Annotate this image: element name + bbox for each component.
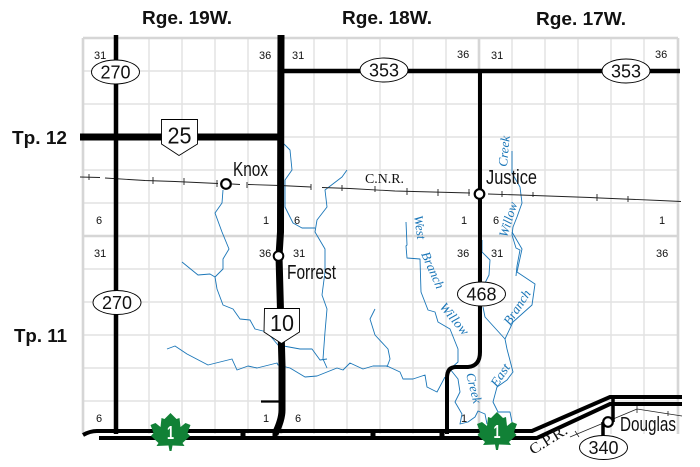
creek labels: Branch: [500, 287, 534, 328]
highway 25: [80, 134, 281, 140]
creek labels: [411, 135, 534, 405]
railway: C.N.R.: [80, 174, 681, 202]
shield: highway 25: [162, 120, 198, 156]
creek labels: Creek: [463, 371, 485, 405]
township labels: [12, 128, 67, 346]
road 270: [114, 35, 118, 434]
section numbers: 31: [491, 50, 503, 62]
oval: 270 north: [92, 60, 140, 84]
oval: 468: 468: [466, 284, 497, 304]
town: Justice: Justice: [486, 167, 537, 189]
creek labels: East: [486, 360, 513, 391]
oval: 353 east: 353: [611, 62, 641, 82]
oval: 340: [580, 436, 628, 460]
section numbers: 36: [655, 49, 667, 61]
oval: 353 west: 353: [369, 60, 399, 80]
section numbers: 31: [292, 50, 304, 62]
creek labels: Willow: [437, 299, 473, 338]
maple leaf: highway 1 east: 1: [494, 422, 500, 442]
creek labels: Creek: [495, 135, 513, 167]
town: Knox: [221, 159, 268, 189]
oval: 468: [458, 282, 506, 306]
section numbers: 1: [263, 413, 269, 425]
maple leaf: highway 1 east: [477, 412, 517, 450]
section numbers: 6: [295, 413, 301, 425]
section numbers: 36: [457, 248, 469, 260]
oval: 270 north: 270: [100, 62, 131, 82]
section numbers: 6: [96, 215, 102, 227]
road 353: [281, 69, 680, 73]
shield: highway 25: 25: [168, 122, 192, 148]
maple leaf: highway 1 west: [150, 413, 190, 451]
section numbers: 36: [259, 50, 271, 62]
side road stub: [261, 400, 280, 403]
town: Justice: [475, 167, 537, 199]
maple leaf: highway 1 west: 1: [167, 423, 174, 443]
section numbers: 36: [656, 248, 668, 260]
section numbers: 6: [96, 413, 102, 425]
road 340: [603, 399, 613, 438]
section numbers: 36: [457, 49, 469, 61]
section numbers: 1: [461, 215, 467, 227]
township grid: [83, 38, 678, 434]
oval: 270 south: [93, 290, 141, 314]
range headings: Rge. 17W.: [536, 9, 626, 29]
highway 10: [275, 35, 282, 434]
section numbers: [94, 49, 668, 425]
range headings: Rge. 18W.: [342, 8, 432, 28]
town: Knox: Knox: [233, 159, 268, 181]
section numbers: 6: [493, 215, 499, 227]
range headings: Rge. 19W.: [142, 8, 232, 28]
section numbers: 31: [94, 248, 106, 260]
town: Forrest: Forrest: [287, 262, 336, 284]
town: Forrest: [274, 251, 336, 284]
oval: 270 south: 270: [102, 293, 132, 313]
township labels: Tp. 12: [12, 128, 67, 148]
section numbers: 31: [293, 248, 305, 260]
section numbers: 31: [491, 248, 503, 260]
oval: 340: 340: [588, 438, 619, 458]
town: Douglas: [603, 414, 676, 436]
section numbers: 1: [263, 215, 269, 227]
section numbers: 36: [259, 248, 271, 260]
shield: highway 10: [264, 308, 300, 344]
town: Douglas: Douglas: [620, 414, 676, 436]
oval: 353 east: [602, 59, 650, 83]
section numbers: 31: [94, 50, 106, 62]
trans-canada highway 1: [83, 397, 682, 438]
label: C.P.R.: C.P.R.: [527, 423, 571, 458]
road 468: [447, 71, 480, 434]
section numbers: 1: [461, 413, 467, 425]
section numbers: 1: [659, 215, 665, 227]
township labels: Tp. 11: [14, 326, 67, 346]
creek labels: Branch: [418, 249, 448, 291]
section numbers: 6: [294, 215, 300, 227]
range headings: [142, 8, 626, 29]
label: C.N.R.: C.N.R.: [365, 172, 404, 187]
shield: highway 10: 10: [270, 310, 294, 336]
creek labels: Willow: [496, 200, 520, 239]
creek labels: West: [411, 214, 429, 241]
rivers: [167, 144, 535, 424]
oval: 353 west: [360, 58, 408, 82]
railway: C.P.R.: [570, 406, 682, 437]
